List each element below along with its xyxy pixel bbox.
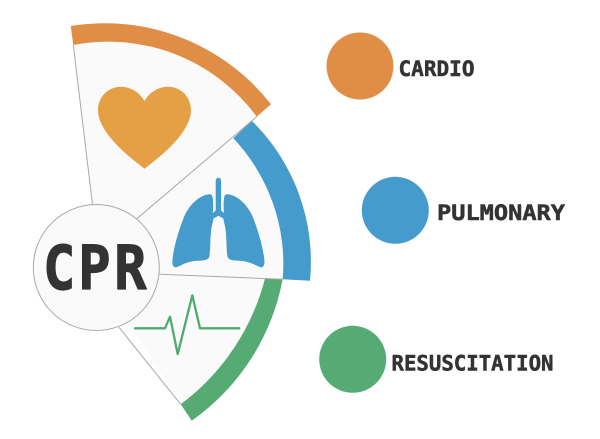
- icon: heart: [98, 87, 191, 169]
- legend: pulmonary: [362, 177, 565, 244]
- icon: lungs: [172, 180, 264, 267]
- panel: resuscitation wedge: [96, 273, 283, 421]
- legend: resuscitation: [319, 326, 554, 393]
- label: pulmonary: PULMONARY: [437, 201, 565, 225]
- icon: heartbeat line: [135, 295, 239, 354]
- legend: cardio: [326, 32, 474, 100]
- title: CPR: CPR: [43, 233, 147, 304]
- legend dot: orange: [326, 32, 394, 100]
- arc: resuscitation green band: [181, 278, 283, 421]
- center circle: CPR: [33, 204, 159, 330]
- legend dot: green: [319, 326, 386, 393]
- panel: pulmonary wedge: [96, 121, 311, 281]
- legend dot: blue: [362, 177, 429, 244]
- arc: cardio orange band: [71, 23, 271, 117]
- label: cardio: CARDIO: [398, 57, 474, 81]
- panel: cardio wedge: [71, 23, 271, 267]
- arc: pulmonary blue band: [233, 121, 311, 281]
- label: resuscitation: RESUSCITATION: [392, 352, 554, 376]
